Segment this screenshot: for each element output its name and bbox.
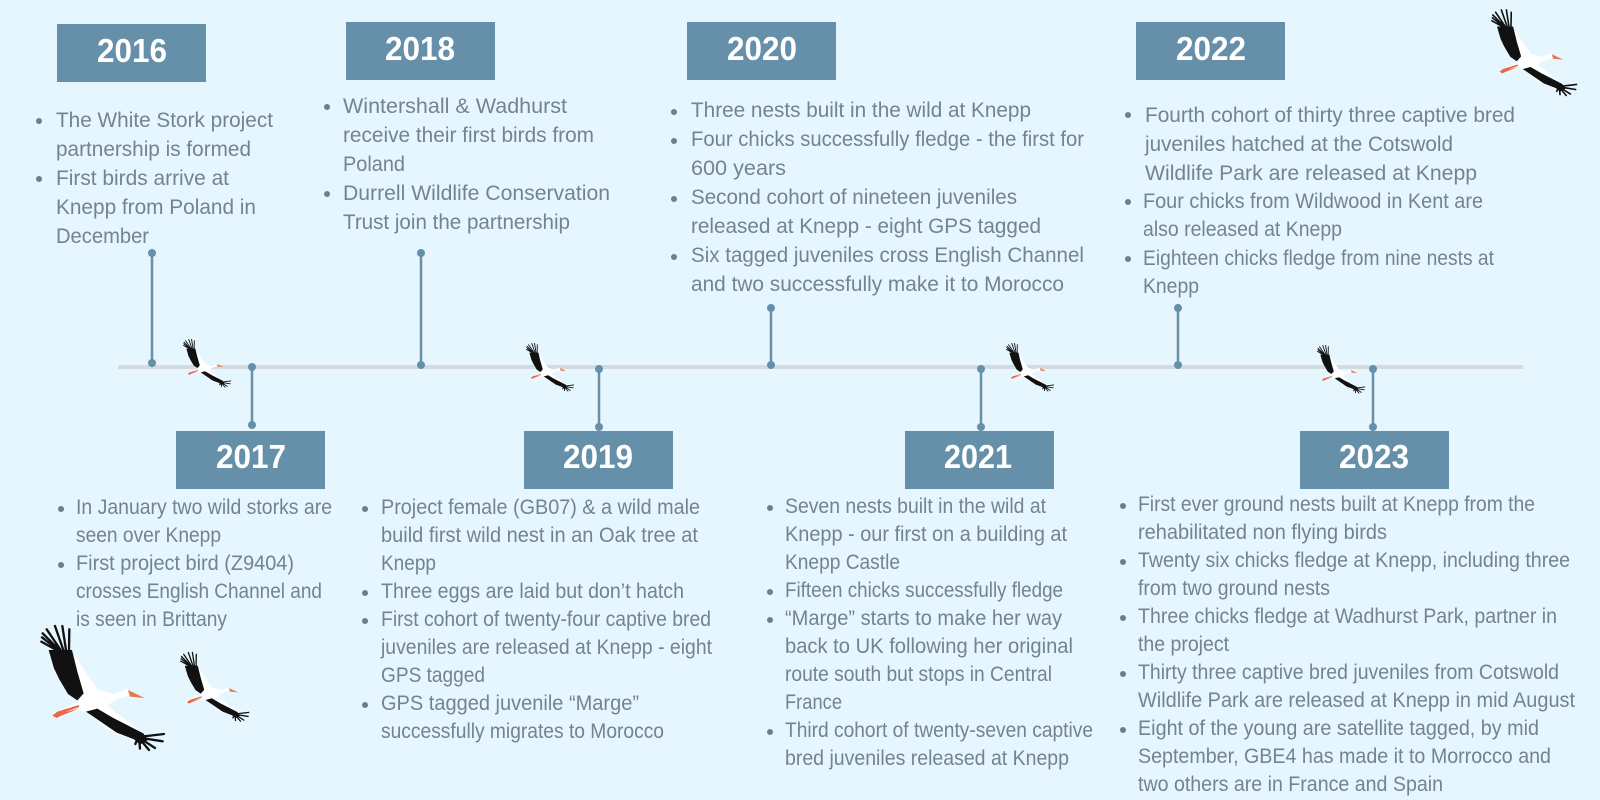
icon: stork on timeline near 2021: [1007, 343, 1054, 391]
heading: 2017: 2017: [216, 438, 286, 475]
text block: 2018 events: Durrell Wildlife Conservation: [343, 182, 610, 205]
text block: 2021 events: bred juveniles released at Knepp: [785, 747, 1069, 770]
connector: 2017: [248, 363, 256, 429]
text block: 2023 events: rehabilitated non flying birds: [1138, 521, 1387, 544]
text block: 2020 events: released at Knepp - eight GPS tagged: [691, 215, 1041, 238]
text block: 2018 events: Wintershall & Wadhurst: [343, 95, 567, 118]
text block: 2016 events: First birds arrive at: [56, 167, 229, 190]
text block: 2017 events: In January two wild storks are: [76, 496, 332, 519]
panel: 2017: [58, 363, 332, 631]
icon: small stork bottom left: [181, 652, 249, 721]
text block: 2022 events: Eighteen chicks fledge from nine nests at: [1143, 247, 1494, 270]
panel: 2020: [671, 22, 1084, 369]
text block: 2019 events: [362, 496, 712, 743]
text block: 2022 events: Wildlife Park are released at Knepp: [1145, 162, 1477, 185]
heading: 2016: 2016: [97, 32, 167, 69]
icon: stork on timeline near 2023: [1318, 345, 1365, 393]
heading: 2023: 2023: [1339, 438, 1409, 475]
panel: 2021: [767, 365, 1093, 770]
text block: 2021 events: back to UK following her original: [785, 635, 1073, 658]
panel: 2022: [1125, 22, 1515, 369]
text block: 2016 events: partnership is formed: [56, 138, 251, 161]
text block: 2020 events: 600 years: [691, 157, 786, 180]
text block: 2016 events: [36, 109, 273, 248]
text block: 2023 events: two others are in France and Spain: [1138, 773, 1443, 796]
text block: 2020 events: Three nests built in the wild at Knepp: [691, 99, 1031, 122]
heading: 2020: 2020: [727, 30, 797, 67]
text block: 2019 events: GPS tagged juvenile “Marge”: [381, 692, 639, 715]
text block: 2022 events: [1125, 104, 1515, 298]
heading: 2018: [346, 22, 495, 80]
text block: 2022 events: Four chicks from Wildwood in Kent are: [1143, 190, 1483, 213]
text block: 2021 events: route south but stops in Central: [785, 663, 1052, 686]
heading: 2018: 2018: [385, 30, 455, 67]
text block: 2019 events: juveniles are released at Knepp - eight: [380, 636, 712, 659]
connector: 2022: [1174, 304, 1182, 369]
heading: 2017: [176, 431, 325, 489]
text block: 2023 events: Three chicks fledge at Wadhurst Park, partner in: [1138, 605, 1557, 628]
heading: 2022: [1136, 22, 1285, 80]
panel: 2023: [1120, 365, 1575, 796]
text block: 2021 events: [767, 495, 1093, 770]
text block: 2020 events: Four chicks successfully fledge - the first for: [691, 128, 1084, 151]
text block: 2023 events: Thirty three captive bred juveniles from Cotswold: [1138, 661, 1559, 684]
text block: 2023 events: Twenty six chicks fledge at Knepp, including three: [1138, 549, 1570, 572]
text block: 2021 events: Fifteen chicks successfully fledge: [785, 579, 1063, 602]
text block: 2020 events: Six tagged juveniles cross English Channel: [691, 244, 1084, 267]
text block: 2016 events: The White Stork project: [56, 109, 273, 132]
text block: 2023 events: [1120, 493, 1575, 796]
text block: 2018 events: Trust join the partnership: [343, 211, 570, 234]
text block: 2021 events: France: [785, 691, 842, 714]
text block: 2018 events: [324, 95, 610, 234]
text block: 2020 events: Second cohort of nineteen juveniles: [691, 186, 1017, 209]
connector: 2020: [767, 304, 775, 369]
panel: 2016: [36, 24, 273, 367]
text block: 2022 events: juveniles hatched at the Cotswold: [1144, 133, 1453, 156]
heading: 2019: 2019: [563, 438, 633, 475]
text block: 2023 events: First ever ground nests built at Knepp from the: [1138, 493, 1535, 516]
text block: 2016 events: December: [56, 225, 149, 248]
text block: 2021 events: Knepp - our first on a building at: [785, 523, 1067, 546]
connector: 2021: [977, 365, 985, 431]
text block: 2021 events: Knepp Castle: [785, 551, 900, 574]
text block: 2023 events: Eight of the young are satellite tagged, by mid: [1138, 717, 1539, 740]
text block: 2019 events: successfully migrates to Morocco: [381, 720, 664, 743]
heading: 2023: [1300, 431, 1449, 489]
text block: 2017 events: seen over Knepp: [76, 524, 221, 547]
text block: 2018 events: Poland: [343, 153, 405, 176]
text block: 2018 events: receive their first birds from: [343, 124, 594, 147]
heading: 2016: [57, 24, 206, 82]
text block: 2022 events: also released at Knepp: [1143, 218, 1342, 241]
text block: 2019 events: build first wild nest in an Oak tree at: [381, 524, 698, 547]
heading: 2020: [687, 22, 836, 80]
text block: 2017 events: [58, 496, 332, 631]
text block: 2022 events: Knepp: [1143, 275, 1199, 298]
text block: 2017 events: is seen in Brittany: [76, 608, 227, 631]
text block: 2023 events: Wildlife Park are released at Knepp in mid August: [1138, 689, 1575, 712]
text block: 2021 events: “Marge” starts to make her way: [785, 607, 1062, 630]
icon: stork on timeline near 2017: [184, 339, 231, 387]
panel: 2018: [324, 22, 610, 369]
heading: 2021: 2021: [944, 438, 1012, 475]
text block: 2019 events: Three eggs are laid but don’t hatch: [381, 580, 684, 603]
text block: 2023 events: from two ground nests: [1138, 577, 1330, 600]
text block: 2020 events: [671, 99, 1084, 296]
text block: 2019 events: Project female (GB07) & a wild male: [381, 496, 700, 519]
text block: 2016 events: Knepp from Poland in: [56, 196, 256, 219]
text block: 2017 events: First project bird (Z9404): [76, 552, 294, 575]
icon: stork on timeline near 2019: [527, 343, 574, 391]
text block: 2023 events: the project: [1138, 633, 1229, 656]
text block: 2017 events: crosses English Channel and: [76, 580, 322, 603]
text block: 2022 events: Fourth cohort of thirty three captive bred: [1145, 104, 1515, 127]
text block: 2019 events: First cohort of twenty-four captive bred: [381, 608, 711, 631]
connector: 2018: [417, 249, 425, 369]
connector: 2019: [595, 365, 603, 431]
heading: 2019: [524, 431, 673, 489]
text block: 2021 events: Third cohort of twenty-seven captive: [785, 719, 1093, 742]
icon: large stork bottom left: [41, 626, 164, 750]
connector: 2016: [148, 249, 156, 367]
connector: 2023: [1369, 365, 1377, 431]
panel: 2019: [362, 365, 712, 743]
text block: 2023 events: September, GBE4 has made it to Morrocco and: [1138, 745, 1551, 768]
text block: 2020 events: and two successfully make it to Morocco: [691, 273, 1064, 296]
heading: 2021: [905, 431, 1054, 489]
text block: 2019 events: GPS tagged: [381, 664, 485, 687]
heading: 2022: 2022: [1176, 30, 1246, 67]
text block: 2021 events: Seven nests built in the wild at: [785, 495, 1046, 518]
text block: 2019 events: Knepp: [381, 552, 436, 575]
icon: stork top right: [1492, 10, 1577, 95]
timeline axis: [118, 365, 1523, 369]
